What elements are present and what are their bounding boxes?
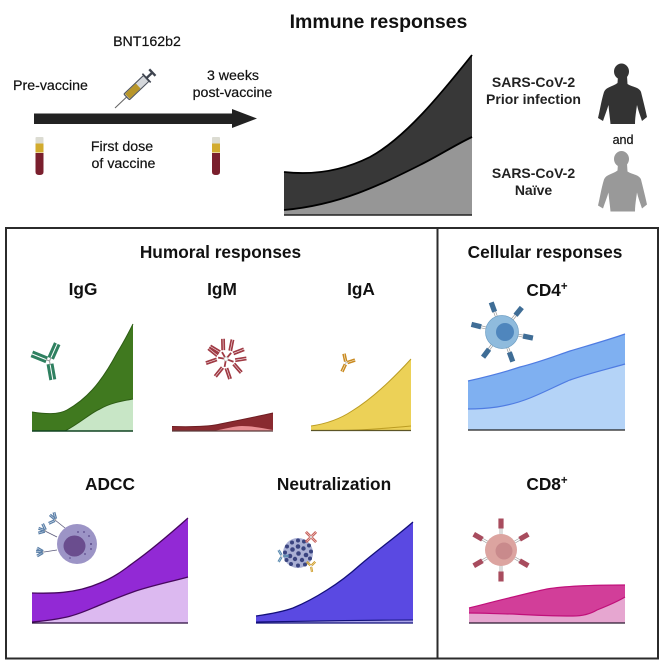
label: BNT162b2: BNT162b2: [113, 34, 181, 50]
legend: SARS-CoV-2 naive: Naïve: [515, 182, 552, 198]
heading: CD4+: +: [561, 281, 568, 293]
heading: CD8+: +: [561, 475, 568, 487]
legend: SARS-CoV-2 naive: SARS-CoV-2: [492, 165, 575, 181]
icon: blood tube pre-vaccine: [36, 137, 44, 175]
chart: IgG: [32, 324, 133, 431]
legend: SARS-CoV-2 prior infection: SARS-CoV-2: [492, 74, 575, 90]
panel: cellular responses frame: [438, 228, 658, 658]
icon: IgA antibody: [341, 353, 355, 372]
heading: Neutralization: Neutralization: [277, 474, 391, 494]
chart: ADCC: [32, 518, 188, 623]
chart: IgA: [311, 359, 411, 430]
icon: IgM antibody: [205, 338, 247, 380]
icon: IgG antibody: [31, 343, 59, 380]
heading: IgM: IgM: [207, 279, 237, 299]
heading: CD8+: CD8: [526, 474, 561, 494]
heading: IgG: IgG: [69, 279, 97, 299]
panel: humoral responses frame: [6, 228, 438, 658]
heading: Cellular responses: Cellular responses: [468, 242, 622, 262]
heading: ADCC: ADCC: [85, 474, 135, 494]
icon: gray person: [598, 151, 647, 212]
heading: CD4+: CD4: [526, 280, 561, 300]
icon: dark person: [598, 64, 647, 124]
arrow: timeline: [34, 109, 257, 128]
icon: CD8 T cell: [472, 518, 530, 582]
label: First dose of vaccine: of vaccine: [92, 156, 156, 172]
icon: blood tube post-vaccine: [212, 137, 220, 175]
label: 3 weeks post-vaccine: post-vaccine: [193, 85, 272, 101]
timeline section: [13, 34, 272, 175]
chart: overall immune responses: [284, 55, 472, 215]
icon: ADCC effector cell: [36, 512, 97, 564]
icon: CD4 T cell: [471, 302, 533, 362]
label: Pre-vaccine: Pre-vaccine: [13, 78, 88, 94]
heading: IgA: IgA: [347, 279, 375, 299]
chart: Neutralization: [256, 522, 413, 623]
chart: CD8: [469, 585, 625, 623]
chart: IgM: [172, 413, 273, 431]
label: and: and: [613, 133, 633, 147]
icon: virus with antibodies: [278, 531, 317, 572]
title: Immune responses: Immune responses: [290, 11, 468, 33]
icon: syringe: [111, 68, 156, 112]
label: First dose of vaccine: First dose: [91, 139, 153, 155]
legend: SARS-CoV-2 prior infection: Prior infection: [486, 91, 581, 107]
heading: Humoral responses: Humoral responses: [140, 242, 301, 262]
chart: CD4: [468, 334, 625, 430]
label: 3 weeks post-vaccine: 3 weeks: [207, 68, 259, 84]
